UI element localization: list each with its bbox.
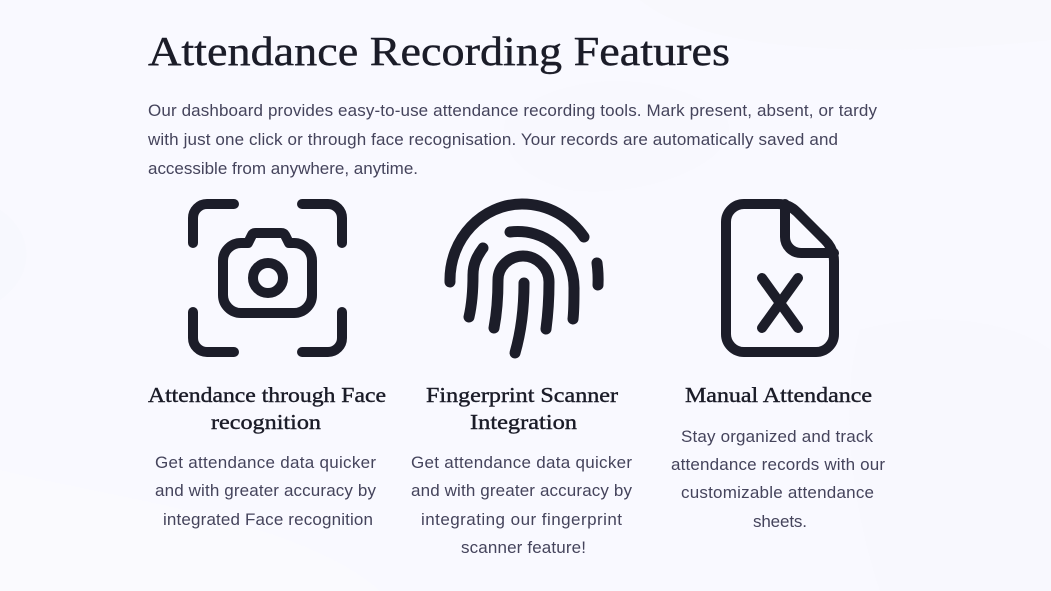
heading: fingerprint scanner: Fingerprint Scanner [426,383,618,407]
panel: fingerprint scanner [411,204,632,557]
text: manual attendance description: sheets. [753,512,807,531]
intro text block: Our dashboard provides easy-to-use attendance recording tools. Mark present, absent, or tardy [148,101,878,120]
panel: face recognition [148,204,386,529]
text: fingerprint description: and with greater accuracy by [411,481,632,500]
text: fingerprint description: Get attendance data quicker [411,453,632,472]
icon: fingerprint [450,204,598,353]
heading: manual attendance: Manual Attendance [685,383,872,407]
heading: fingerprint scanner: Integration [470,410,578,434]
heading: fingerprint scanner [426,383,618,434]
icon: camera in viewfinder [193,204,342,352]
text: manual attendance description [671,427,885,531]
text: face recognition description [155,453,376,529]
heading: face recognition: Attendance through Face [148,383,386,407]
text: fingerprint description: scanner feature! [461,538,586,557]
text: face recognition description: Get attendance data quicker [155,453,376,472]
panel: manual attendance [671,204,885,531]
text: face recognition description: integrated Face recognition [163,510,373,529]
intro text block [147,101,878,178]
intro text block: accessible from anywhere, anytime. [148,159,418,178]
icon: spreadsheet file [726,204,834,352]
heading: face recognition [148,383,386,434]
text: fingerprint description [411,453,632,557]
text: manual attendance description: customizable attendance [681,483,874,502]
text: manual attendance description: attendance records with our [671,455,885,474]
intro text block: with just one click or through face recognisation. Your records are automatically saved and [147,130,838,149]
title: Attendance Recording Features [148,28,730,74]
text: manual attendance description: Stay organized and track [681,427,874,446]
text: face recognition description: and with greater accuracy by [155,481,376,500]
text: fingerprint description: integrating our fingerprint [421,510,622,529]
heading: face recognition: recognition [211,410,322,434]
